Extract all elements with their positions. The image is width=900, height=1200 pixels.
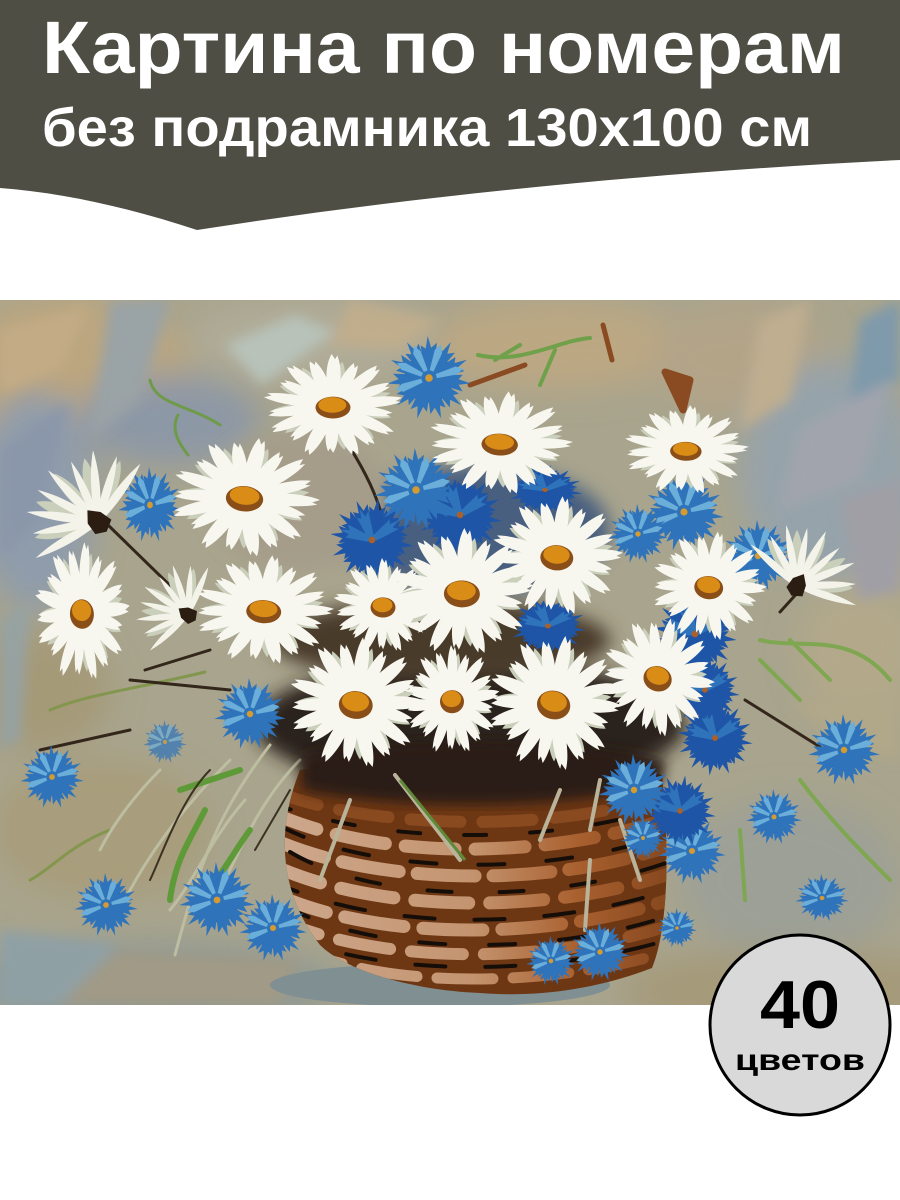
painting: daisies and cornflowers in a basket bbox=[0, 295, 900, 1030]
badge number: 40 bbox=[760, 967, 840, 1043]
daisies bbox=[0, 354, 881, 781]
cornflowers bbox=[20, 336, 881, 986]
painted background bbox=[0, 295, 900, 1030]
stems and foliage bbox=[30, 325, 890, 955]
dark mass behind bouquet bbox=[246, 457, 695, 778]
badge: 40 colours bbox=[710, 935, 890, 1115]
header banner bbox=[0, 0, 900, 230]
title: Картина по номерам bbox=[42, 6, 845, 89]
subtitle: без подрамника 130х100 см bbox=[42, 98, 812, 158]
badge label: цветов bbox=[735, 1044, 865, 1077]
basket bbox=[270, 741, 680, 1007]
